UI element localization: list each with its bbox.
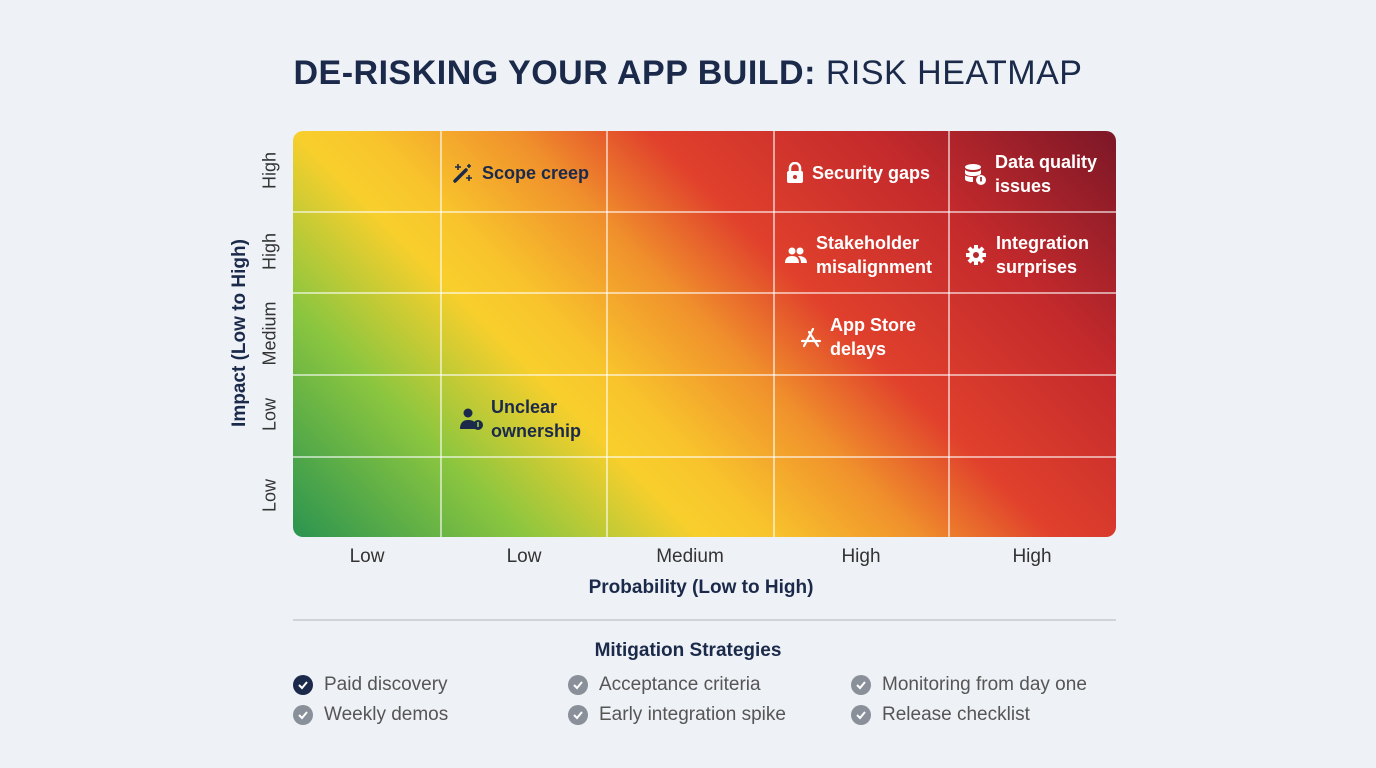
- risk: app store delays: [800, 315, 916, 359]
- text: High: [260, 152, 280, 189]
- risk: scope creep: Scope creep: [482, 163, 589, 183]
- text: Low: [260, 398, 280, 431]
- mitigation list: [293, 674, 1087, 725]
- risk: stakeholder misalignment: [785, 233, 932, 277]
- risk: app store delays: delays: [830, 339, 886, 359]
- text: Medium: [656, 546, 724, 567]
- text: Acceptance criteria: [599, 674, 761, 695]
- risk: integration surprises: [966, 233, 1089, 277]
- text: Low: [260, 479, 280, 512]
- text: Low: [350, 546, 384, 567]
- risk: unclear ownership: ownership: [491, 421, 581, 441]
- risk: app store delays: App Store: [830, 315, 916, 335]
- risk: data quality issues: [965, 152, 1097, 196]
- risk: integration surprises: surprises: [996, 257, 1077, 277]
- risk: stakeholder misalignment: misalignment: [816, 257, 932, 277]
- text: Monitoring from day one: [882, 674, 1087, 695]
- risk: integration surprises: Integration: [996, 233, 1089, 253]
- risk: unclear ownership: [460, 397, 581, 441]
- y-axis labels: [260, 152, 280, 512]
- text: Release checklist: [882, 704, 1030, 725]
- text: Early integration spike: [599, 704, 786, 725]
- risk: data quality issues: issues: [995, 176, 1051, 196]
- x-axis title: Probability (Low to High): [589, 577, 813, 598]
- title: DE-RISKING YOUR APP BUILD: RISK HEATMAP: [293, 54, 1082, 92]
- risk: security gaps: Security gaps: [812, 163, 930, 183]
- text: Paid discovery: [324, 674, 448, 695]
- text: Low: [507, 546, 541, 567]
- heatmap grid: [293, 131, 1116, 537]
- risk: unclear ownership: Unclear: [491, 397, 557, 417]
- text: High: [1012, 546, 1052, 567]
- text: High: [260, 233, 280, 270]
- x-axis labels: [350, 546, 1052, 567]
- mitigation heading: Mitigation Strategies: [595, 640, 781, 661]
- text: Medium: [260, 301, 280, 366]
- text: Weekly demos: [324, 704, 448, 725]
- text: High: [841, 546, 881, 567]
- risk: stakeholder misalignment: Stakeholder: [816, 233, 919, 253]
- y-axis title: Impact (Low to High): [229, 239, 250, 427]
- risk: data quality issues: Data quality: [995, 152, 1097, 172]
